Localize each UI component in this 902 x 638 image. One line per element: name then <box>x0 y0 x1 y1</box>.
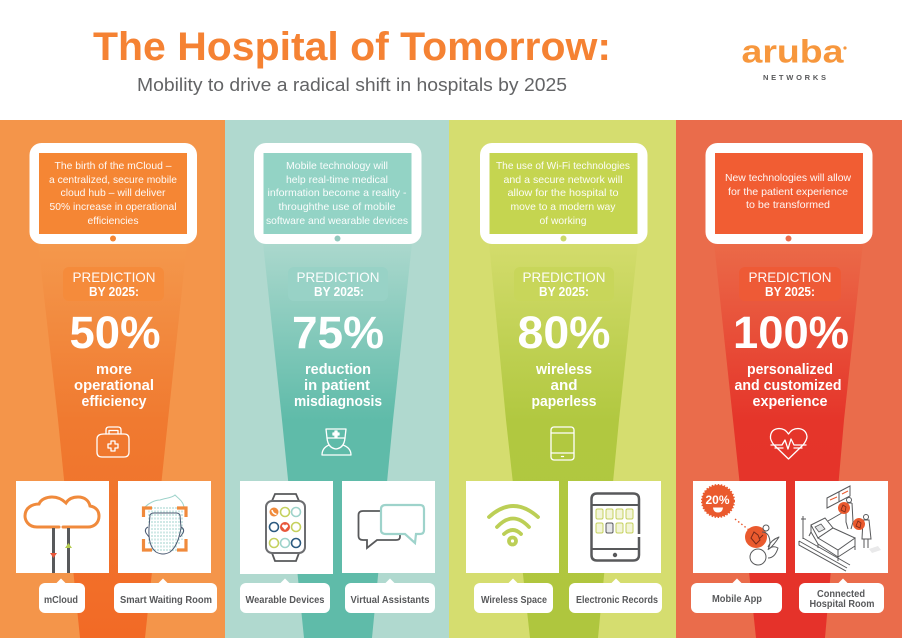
tablet: patient experience message <box>706 143 872 244</box>
tile: Virtual Assistants <box>342 481 435 573</box>
label: Connected Hospital Room <box>799 578 884 613</box>
description <box>532 361 596 410</box>
tablet: mCloud message: The birth of the mCloud – <box>54 160 172 172</box>
panel: mCloud operational efficiency <box>0 120 225 638</box>
icon: face scan <box>144 495 186 554</box>
label: Electronic Records: Electronic Records <box>576 594 658 606</box>
label: Wearable Devices <box>240 578 330 613</box>
statistic: 80%: 80% <box>518 307 610 358</box>
logo: aruba networks <box>742 34 847 82</box>
logo: aruba networks: aruba <box>742 34 844 70</box>
icon: smartwatch <box>266 494 305 561</box>
tile: Smart Waiting Room <box>118 481 211 573</box>
subtitle: Mobility to drive a radical shift in hospitals by 2025 <box>137 74 567 95</box>
description: personalized <box>747 361 833 378</box>
label: Virtual Assistants <box>345 578 435 613</box>
tablet: Wi-Fi message: of working <box>540 215 587 227</box>
tablet: mobile technology message: Mobile technology will <box>286 160 388 172</box>
tablet: mCloud message: cloud hub – will deliver <box>60 187 166 199</box>
tablet: mobile technology message: throughthe use of mobile <box>278 201 396 213</box>
tablet: mobile technology message: help real-time medical <box>286 174 388 186</box>
description <box>74 361 154 410</box>
prediction badge <box>63 267 164 301</box>
statistic: 75%: 75% <box>292 307 384 358</box>
statistic: 50%: 50% <box>70 307 160 358</box>
logo: aruba networks: NETWORKS <box>763 73 826 82</box>
description: experience <box>752 393 828 410</box>
description: misdiagnosis <box>294 393 382 410</box>
label: mCloud <box>39 578 85 613</box>
prediction badge: BY 2025: <box>539 285 589 299</box>
label: Wearable Devices: Wearable Devices <box>246 594 325 606</box>
icon: connected hospital room <box>799 486 881 571</box>
icon: wifi <box>489 506 538 544</box>
panel: patient misdiagnosis <box>225 120 449 638</box>
label: Wireless Space: Wireless Space <box>481 594 547 606</box>
icon: tablet records <box>592 494 639 560</box>
tile: mCloud <box>16 481 109 573</box>
tile: Mobile App <box>693 481 786 573</box>
icon: cloud <box>25 497 99 573</box>
description: efficiency <box>82 393 147 410</box>
label: Mobile App: Mobile App <box>712 593 762 605</box>
tablet: Wi-Fi message: move to a modern way <box>510 201 616 213</box>
icon: chat bubbles <box>358 505 424 548</box>
prediction badge: BY 2025: <box>765 285 815 299</box>
description: in patient <box>304 377 370 394</box>
tile: Wearable Devices <box>240 481 333 574</box>
tablet: Wi-Fi message: allow for the hospital to <box>508 187 619 199</box>
statistic: 100%: 100% <box>733 307 849 358</box>
icon: medical bag <box>97 427 129 457</box>
prediction badge: PREDICTION <box>522 269 606 285</box>
prediction badge <box>739 267 841 301</box>
label: Connected Hospital Room: Hospital Room <box>810 598 874 610</box>
label: Electronic Records <box>569 578 662 613</box>
icon: nurse <box>322 429 351 455</box>
tablet: mobile technology message: software and wearable devices <box>266 215 408 227</box>
description: more <box>96 361 132 378</box>
label: Mobile App <box>691 578 782 613</box>
description: and <box>550 377 578 394</box>
tablet: mobile technology message: information become a reality - <box>268 187 407 199</box>
panel: wireless and paperless <box>449 120 676 638</box>
tablet: mCloud message: 50% increase in operational <box>50 201 176 213</box>
label: Smart Waiting Room <box>114 578 217 613</box>
prediction badge: BY 2025: <box>89 285 139 299</box>
description: wireless <box>535 361 592 378</box>
prediction badge: PREDICTION <box>72 269 156 285</box>
tablet: mCloud message: efficiencies <box>88 215 138 227</box>
description: operational <box>74 377 154 394</box>
tile: Connected Hospital Room <box>795 481 888 573</box>
tile: Electronic Records <box>568 481 661 573</box>
icon: heart with pulse <box>770 428 807 459</box>
prediction badge: BY 2025: <box>314 285 364 299</box>
tablet: patient experience message: for the patient experience <box>728 186 848 198</box>
prediction badge: PREDICTION <box>748 269 832 285</box>
description: reduction <box>305 361 371 378</box>
tablet: Wi-Fi message: The use of Wi-Fi technologies <box>496 160 630 172</box>
label: mCloud: mCloud <box>44 594 78 606</box>
tablet: mCloud message: a centralized, secure mobile <box>49 174 177 186</box>
tablet: mCloud message <box>30 143 197 244</box>
tablet: Wi-Fi message <box>480 143 648 244</box>
description <box>294 361 382 410</box>
tablet: patient experience message: to be transformed <box>746 199 830 211</box>
tablet: mobile technology message <box>254 143 422 244</box>
prediction badge: PREDICTION <box>296 269 380 285</box>
panel: personalized experience <box>676 120 902 638</box>
label: Smart Waiting Room: Smart Waiting Room <box>120 594 212 606</box>
tablet: Wi-Fi message: and a secure network will <box>504 174 622 186</box>
description <box>734 361 842 410</box>
label: Virtual Assistants: Virtual Assistants <box>350 594 430 606</box>
title: The Hospital of Tomorrow: <box>93 25 611 69</box>
prediction badge <box>288 267 388 301</box>
icon: discount badge and patient in wheelchair: 20% <box>705 493 730 507</box>
description: and customized <box>734 377 842 394</box>
prediction badge <box>514 267 614 301</box>
description: paperless <box>532 393 596 410</box>
icon: tablet <box>551 427 574 460</box>
label: Connected Hospital Room: Connected <box>817 588 865 600</box>
tablet: patient experience message: New technologies will allow <box>725 172 851 184</box>
label: Wireless Space <box>474 578 553 613</box>
tile: Wireless Space <box>466 481 559 573</box>
